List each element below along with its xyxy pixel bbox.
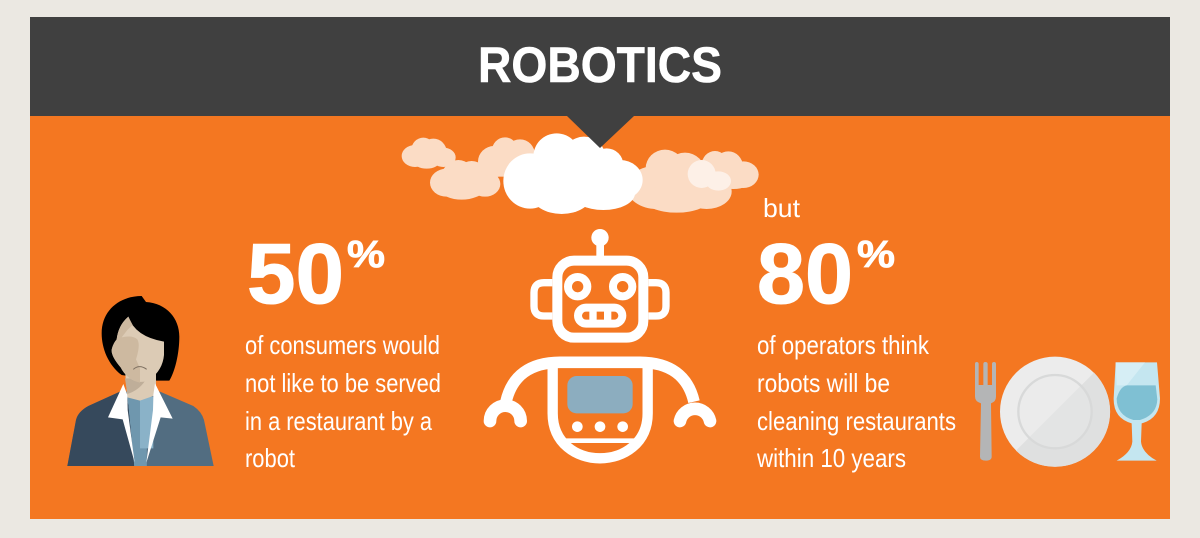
text: consumers: robot xyxy=(245,443,296,473)
text: consumers xyxy=(245,330,441,473)
text: consumers: not like to be served xyxy=(245,368,441,398)
text: operators: cleaning restaurants xyxy=(757,406,956,436)
icon: woman xyxy=(67,296,214,466)
stat: 80%: % xyxy=(857,234,895,276)
icon: robot xyxy=(490,229,710,458)
title: ROBOTICS xyxy=(478,37,722,93)
text: operators: of operators think xyxy=(757,330,930,360)
stat: 80%: 80 xyxy=(757,227,853,322)
stat: 80% xyxy=(757,227,895,322)
stat: 50% xyxy=(247,227,385,322)
icon: fork, plate and glass xyxy=(975,357,1160,467)
text: operators xyxy=(756,330,956,473)
stat: 50%: 50 xyxy=(247,227,344,322)
text: operators: within 10 years xyxy=(756,443,906,473)
stat: 50%: % xyxy=(347,234,385,276)
text: but: but xyxy=(763,193,801,223)
icon: glass xyxy=(1114,362,1160,461)
text: consumers: of consumers would xyxy=(245,330,440,360)
header band with pointer xyxy=(30,17,1170,148)
icon: plate xyxy=(1000,357,1110,467)
icon: clouds xyxy=(402,133,759,214)
text: consumers: in a restaurant by a xyxy=(245,406,432,436)
icon: fork xyxy=(975,362,996,461)
text: operators: robots will be xyxy=(757,368,890,398)
